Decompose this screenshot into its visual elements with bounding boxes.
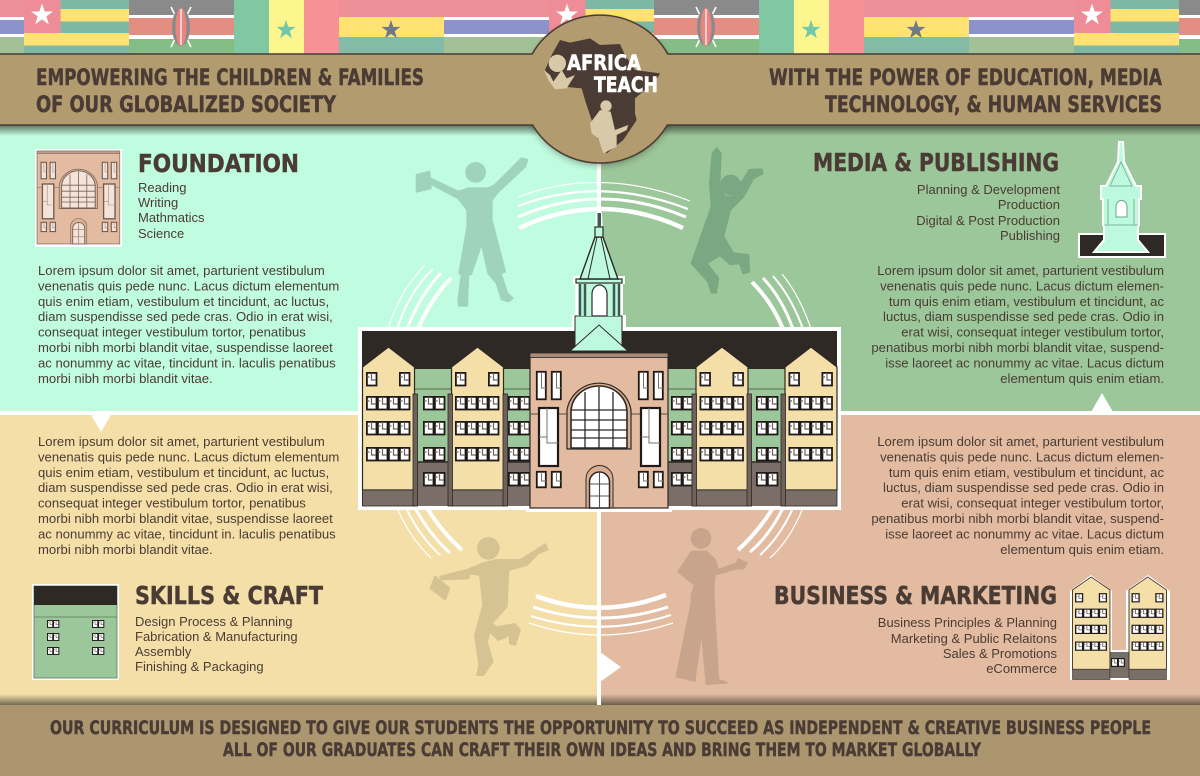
text block: business body: luctus, diam suspendisse sed pede cras. Odio in xyxy=(883,480,1164,495)
text block: business body: venenatis quis pede nunc. Lacus dictum elemen- xyxy=(880,449,1164,464)
text block: skills body: venenatis quis pede nunc. Lacus dictum elementum xyxy=(38,449,339,464)
list: media topics: Digital & Post Production xyxy=(916,213,1060,228)
text block: skills body: ac nonummy ac vitae, tincidunt in. laculis penatibus xyxy=(38,526,336,541)
text block: foundation body: quis enim etiam, vestibulum et tincidunt, ac luctus, xyxy=(38,294,329,309)
header band xyxy=(0,15,1200,164)
arrow: pointer into skills panel xyxy=(90,413,112,432)
header text left xyxy=(36,66,424,118)
list: foundation topics: Writing xyxy=(138,195,178,210)
heading: media and publishing: MEDIA & PUBLISHING xyxy=(813,148,1059,177)
icon: twin gabled buildings for business and marketing xyxy=(1070,575,1170,680)
text block: skills body: morbi nibh morbi blandit vitae, suspendisse laoreet xyxy=(38,511,333,526)
text block: foundation body: consequat integer vestibulum tortor, penatibus xyxy=(38,325,306,340)
illustration: school building xyxy=(358,212,841,512)
text block: media body: penatibus morbi nibh morbi blandit vitae, suspend- xyxy=(871,340,1164,355)
text block: foundation body: ac nonummy ac vitae, tincidunt in. laculis penatibus xyxy=(38,355,336,370)
panel: business and marketing background xyxy=(598,413,1200,705)
text block: business body: Lorem ipsum dolor sit amet, parturient vestibulum xyxy=(877,434,1164,449)
footer band xyxy=(0,705,1200,776)
list: skills topics: Fabrication & Manufacturing xyxy=(135,629,298,644)
text block: media body: venenatis quis pede nunc. Lacus dictum elemen- xyxy=(880,278,1164,293)
arrow: pointer into media panel xyxy=(1091,393,1113,412)
list: foundation topics: Mathmatics xyxy=(138,210,205,225)
logo: Africa Teach: TEACH xyxy=(594,73,658,97)
list: media topics: Planning & Development xyxy=(917,182,1060,197)
list: skills topics: Assembly xyxy=(135,644,192,659)
list: business topics: Business Principles & Planning xyxy=(878,615,1057,630)
logo: Africa Teach: AFRICA xyxy=(567,51,642,75)
header text right xyxy=(769,66,1162,118)
heading: foundation: FOUNDATION xyxy=(138,149,299,178)
text block: foundation body: diam suspendisse sed pede cras. Odio in erat wisi, xyxy=(38,309,333,324)
footer text xyxy=(50,717,1151,761)
heading: skills and craft: SKILLS & CRAFT xyxy=(135,581,323,610)
list: media topics: Production xyxy=(998,197,1060,212)
arrow: pointer into business panel xyxy=(600,652,621,682)
text block: skills body: morbi nibh morbi blandit vitae. xyxy=(38,542,213,557)
text block: foundation body: morbi nibh morbi blandit vitae, suspendisse laoreet xyxy=(38,340,333,355)
text block: foundation body: Lorem ipsum dolor sit amet, parturient vestibulum xyxy=(38,263,325,278)
panel: skills and craft background xyxy=(0,413,598,705)
text block: business body: isse laoreet ac nonummy ac vitae. Lacus dictum xyxy=(885,526,1164,541)
text block: skills body: diam suspendisse sed pede cras. Odio in erat wisi, xyxy=(38,480,333,495)
list: foundation topics: Reading xyxy=(138,180,186,195)
panel: foundation background xyxy=(0,125,598,413)
silhouette: child with book, foundation panel xyxy=(417,158,527,306)
text block: media body: elementum quis enim etiam. xyxy=(1000,371,1164,386)
header text left: OF OUR GLOBALIZED SOCIETY xyxy=(36,93,337,118)
text block: media body: tum quis enim etiam, vestibulum et tincidunt, ac xyxy=(889,294,1164,309)
arcs: concentric white rings around building xyxy=(388,182,811,635)
list: skills topics: Design Process & Planning xyxy=(135,614,293,629)
text block: business body: tum quis enim etiam, vestibulum et tincidunt, ac xyxy=(889,465,1164,480)
list: business topics: Sales & Promotions xyxy=(943,646,1057,661)
silhouette: running child, skills panel xyxy=(431,538,548,675)
list: skills topics: Finishing & Packaging xyxy=(135,659,264,674)
text block: skills body: Lorem ipsum dolor sit amet, parturient vestibulum xyxy=(38,434,325,449)
heading: business and marketing: BUSINESS & MARKETING xyxy=(774,581,1057,610)
text block: business body: elementum quis enim etiam. xyxy=(1000,542,1164,557)
silhouette: jumping child, media panel xyxy=(692,148,763,293)
text block: media body: erat wisi, consequat integer vestibulum tortor, xyxy=(901,325,1164,340)
text block: media body: luctus, diam suspendisse sed pede cras. Odio in xyxy=(883,309,1164,324)
list: business topics: Marketing & Public Relaitons xyxy=(891,631,1057,646)
list: foundation topics: Science xyxy=(138,226,184,241)
text block: foundation body: morbi nibh morbi blandit vitae. xyxy=(38,371,213,386)
silhouette: standing woman, business panel xyxy=(677,529,747,684)
panel: media and publishing background xyxy=(598,125,1200,413)
text block: business body: erat wisi, consequat integer vestibulum tortor, xyxy=(901,496,1164,511)
icon: foundation building facade xyxy=(35,149,122,247)
text block: foundation body: venenatis quis pede nunc. Lacus dictum elementum xyxy=(38,278,339,293)
icon: green wall for skills and craft xyxy=(32,584,119,680)
text block: media body: isse laoreet ac nonummy ac vitae. Lacus dictum xyxy=(885,355,1164,370)
text block: skills body: quis enim etiam, vestibulum et tincidunt, ac luctus, xyxy=(38,465,329,480)
logo: Africa Teach xyxy=(544,38,660,153)
text block: media body: Lorem ipsum dolor sit amet, parturient vestibulum xyxy=(877,263,1164,278)
header text left: EMPOWERING THE CHILDREN & FAMILIES xyxy=(36,66,424,91)
flag strip xyxy=(0,0,1200,54)
list: media topics: Publishing xyxy=(1000,228,1060,243)
text block: business body: penatibus morbi nibh morbi blandit vitae, suspend- xyxy=(871,511,1164,526)
icon: tower for media and publishing xyxy=(1079,142,1165,257)
text block: skills body: consequat integer vestibulum tortor, penatibus xyxy=(38,496,306,511)
list: business topics: eCommerce xyxy=(986,661,1057,676)
